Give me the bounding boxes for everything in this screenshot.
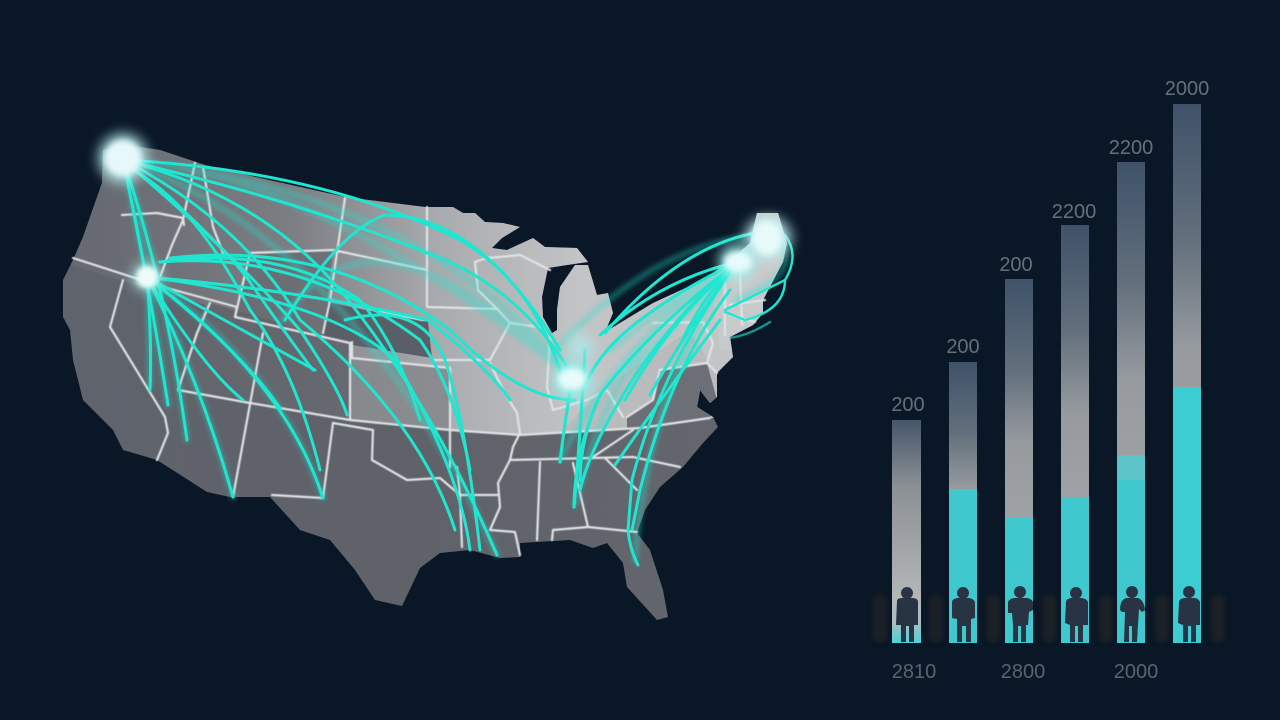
bar 2 xyxy=(946,336,980,643)
year labels: 2000 xyxy=(1114,661,1158,683)
bar 5 xyxy=(1109,137,1153,643)
bar 2: 200 xyxy=(946,336,980,358)
person 2 xyxy=(952,587,975,642)
infographic canvas xyxy=(63,81,1224,678)
year labels xyxy=(892,661,1158,683)
person 6 xyxy=(1178,586,1200,642)
year labels: 2810 xyxy=(892,661,936,683)
faint background figures xyxy=(873,595,1225,642)
city glow: Northeast xyxy=(719,216,792,280)
bar 4 xyxy=(1052,201,1096,643)
person 4 xyxy=(1065,587,1088,642)
city glow: Great Lakes xyxy=(553,333,594,400)
arc glow layer xyxy=(123,160,785,560)
arcs from inland west hub xyxy=(147,255,575,550)
bar 4: 2200 xyxy=(1052,201,1096,223)
bar chart xyxy=(873,78,1225,683)
year labels: 2800 xyxy=(1001,661,1045,683)
flow arcs xyxy=(123,160,792,565)
person 3 xyxy=(1008,586,1033,642)
map landmass xyxy=(50,130,810,630)
bar 1: 200 xyxy=(891,394,925,416)
bar 6: 2000 xyxy=(1165,78,1209,100)
state borders xyxy=(73,163,765,555)
bar 3: 200 xyxy=(999,254,1033,276)
arcs from Northeast hubs xyxy=(574,232,760,565)
person 1 xyxy=(896,587,918,642)
person 5 xyxy=(1120,586,1145,642)
city glow: Pacific Northwest xyxy=(98,133,148,183)
bar 6 xyxy=(1165,78,1209,643)
bar 1 xyxy=(891,394,925,643)
arcs from Great Lakes hub xyxy=(560,350,600,507)
loop arcs around New England xyxy=(725,235,792,338)
city glow: inland west xyxy=(132,262,162,292)
bar 5: 2200 xyxy=(1109,137,1153,159)
arcs from Pacific Northwest hub xyxy=(123,160,575,555)
person silhouettes xyxy=(896,586,1200,642)
bar 3 xyxy=(999,254,1033,643)
map of the United States xyxy=(50,130,810,630)
